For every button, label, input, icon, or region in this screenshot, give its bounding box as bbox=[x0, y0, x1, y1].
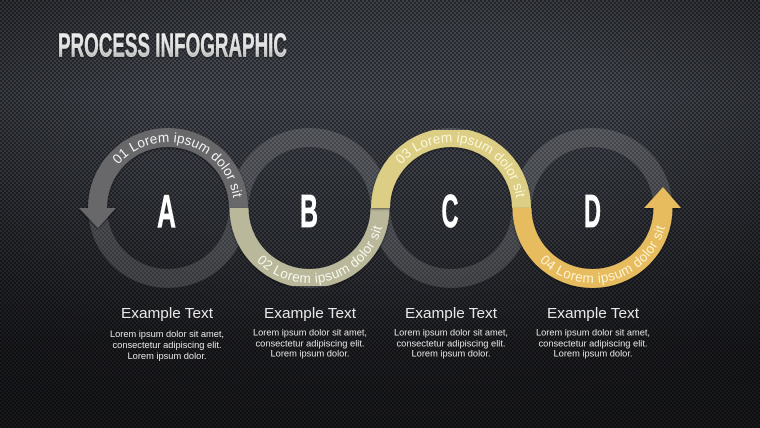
body C: Lorem ipsum dolor. bbox=[412, 348, 490, 358]
ribbon label 04: 04 Lorem ipsum dolor sit bbox=[541, 225, 665, 286]
body A: Lorem ipsum dolor sit amet, bbox=[110, 328, 224, 339]
body C: Lorem ipsum dolor sit amet, bbox=[394, 326, 508, 338]
body B: Lorem ipsum dolor. bbox=[270, 348, 350, 358]
ribbon label 01: 01 Lorem ipsum dolor sit bbox=[113, 132, 242, 198]
text block C bbox=[394, 305, 508, 358]
step A ribbon with left arrow bbox=[79, 138, 238, 228]
body A: consectetur adipiscing elit. bbox=[112, 339, 222, 350]
heading C: Example Text bbox=[405, 305, 498, 322]
body D bbox=[536, 326, 650, 358]
body B: Lorem ipsum dolor sit amet, bbox=[253, 326, 367, 338]
arrow head: step D bbox=[644, 187, 681, 208]
body B: consectetur adipiscing elit. bbox=[256, 338, 364, 348]
letter D: D bbox=[584, 185, 601, 237]
arrow head: step A bbox=[79, 208, 116, 228]
body D: consectetur adipiscing elit. bbox=[538, 338, 648, 348]
heading B: Example Text bbox=[264, 305, 357, 322]
body A bbox=[110, 328, 224, 361]
heading D: Example Text bbox=[547, 305, 640, 322]
body D: Lorem ipsum dolor sit amet, bbox=[536, 326, 650, 338]
ribbon label 02: 02 Lorem ipsum dolor sit bbox=[258, 225, 382, 286]
letter C: C bbox=[442, 185, 458, 237]
body C: consectetur adipiscing elit. bbox=[396, 338, 506, 348]
body B bbox=[253, 326, 367, 358]
step C ribbon bbox=[380, 138, 522, 208]
body D: Lorem ipsum dolor. bbox=[554, 348, 632, 358]
title: PROCESS INFOGRAPHIC bbox=[58, 26, 287, 64]
step B ribbon bbox=[239, 208, 380, 278]
ribbon label 03: 03 Lorem ipsum dolor sit bbox=[396, 132, 525, 198]
letter A: A bbox=[157, 185, 176, 237]
background rings bbox=[98, 138, 663, 278]
body A: Lorem ipsum dolor. bbox=[128, 350, 206, 361]
text block A bbox=[110, 305, 224, 361]
text block D bbox=[536, 305, 650, 358]
heading A: Example Text bbox=[121, 305, 214, 322]
body C bbox=[394, 326, 508, 358]
letter B: B bbox=[300, 185, 318, 237]
step D ribbon with up arrow bbox=[522, 187, 681, 278]
text block B bbox=[253, 305, 367, 358]
